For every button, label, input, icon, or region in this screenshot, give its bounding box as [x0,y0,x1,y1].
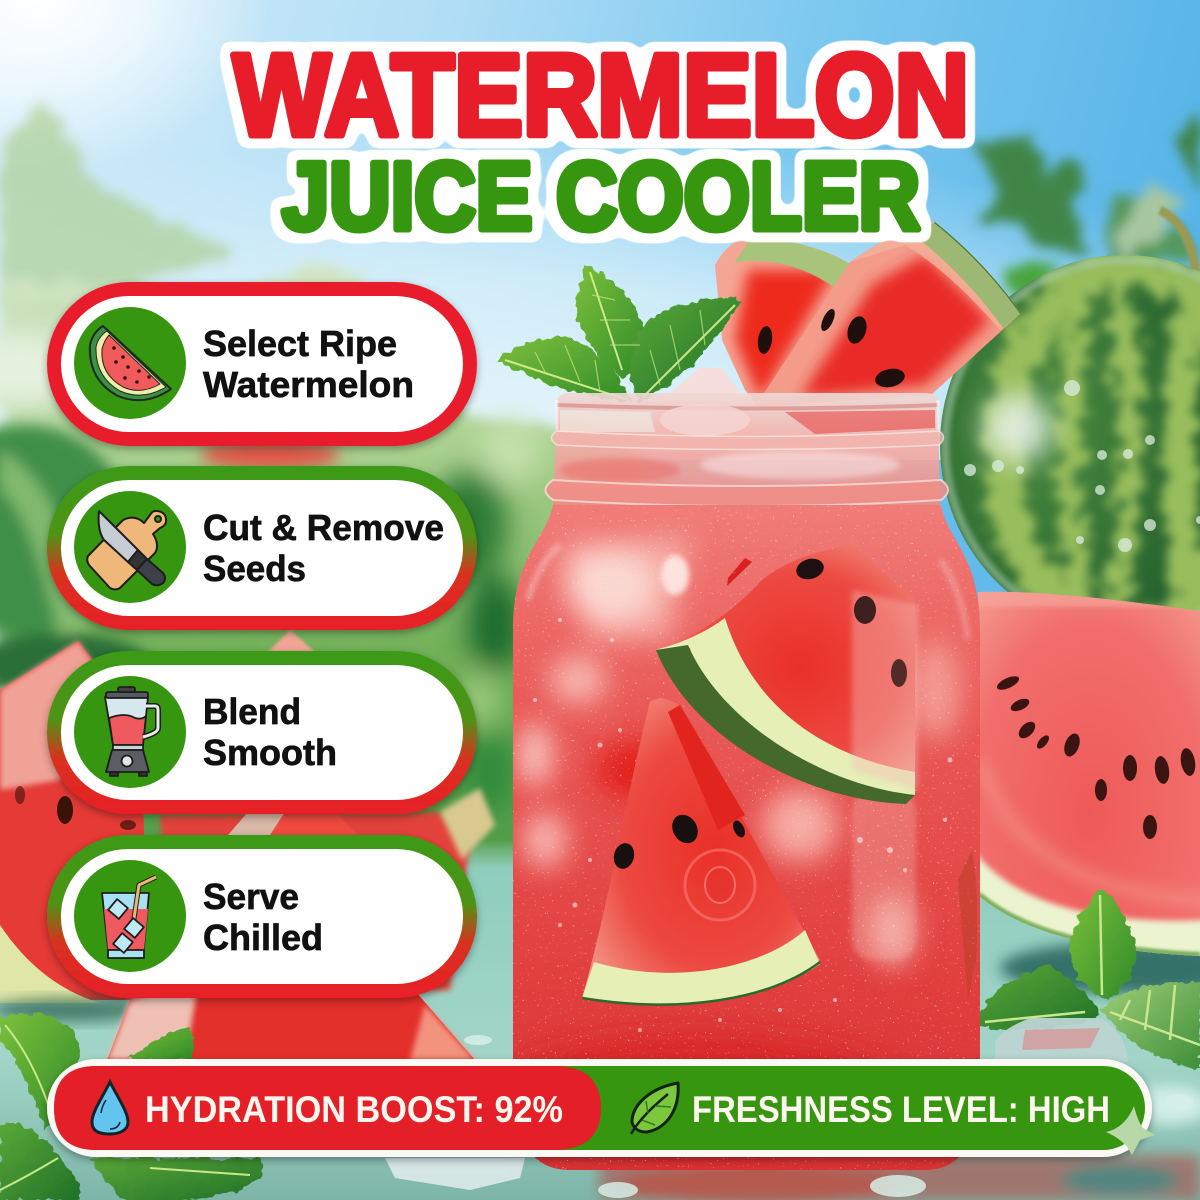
background: leaves top right [972,110,1200,295]
step card 3: blend smooth [47,651,477,814]
watermelon wedge bottom left [107,985,475,1060]
mint garnish [497,265,742,402]
jar rear slice: right wedge [756,222,1021,406]
background: blurred foliage left [0,95,640,880]
condensation specks [513,505,980,1170]
icon: watermelon slice [90,326,171,400]
upper thread [552,431,944,450]
step 2 label: Cut & Remove [203,507,444,548]
stats bar [47,1059,1155,1157]
step 1 label [203,323,414,405]
slice in jar: lower wedge [582,699,820,1005]
step 4 label: Serve [203,876,299,917]
step 1 label: Select Ripe [203,323,397,364]
step card 1: select ripe watermelon [47,282,477,446]
whole watermelon right [940,255,1200,611]
watermelon half slice right [970,580,1200,970]
icon: leaf [631,1083,678,1134]
drink jar [497,215,1030,1170]
step 3 label: Blend [203,691,301,732]
background: blurred whole melon left [0,425,340,697]
title [233,30,969,250]
freshness label: FRESHNESS LEVEL: HIGH [692,1089,1110,1130]
jar contents [500,505,980,1170]
watermelon wedge left, behind the step cards [0,630,495,1003]
icon: blender [105,687,158,776]
step 2 label: Seeds [203,548,306,589]
step card 2: cut and remove seeds [47,466,477,630]
lower thread [546,480,948,506]
step 4 label: Chilled [203,917,323,958]
icon: chilled glass with straw [102,877,156,958]
pale column highlight [852,790,916,960]
ice cube on table [995,1018,1128,1062]
step 3 label: Smooth [203,732,337,773]
slice in jar: upper wedge [655,545,918,804]
icon: water drop [92,1082,128,1134]
ice in jar top [655,368,760,440]
mint leaves bottom left [0,1014,262,1200]
step 3 label [203,691,337,773]
step card 4: serve chilled [47,835,477,998]
title line: JUICE COOLER: JUICE COOLER [282,143,920,250]
jar body [513,505,980,1170]
step 2 label [203,507,444,589]
sparkle mark [1106,1106,1155,1155]
shadow under left wedge [0,998,150,1022]
step 4 label [203,876,323,958]
water droplets on table [385,1035,1194,1198]
glass highlights and condensation [528,545,977,1032]
icon: knife and cutting board [87,511,166,590]
step 1 label: Watermelon [203,364,414,405]
jar rear slice: left wedge [715,240,850,404]
mint leaves bottom right [978,888,1200,1068]
title line: WATERMELON: WATERMELON [233,30,969,160]
hydration label: HYDRATION BOOST: 92% [145,1089,563,1130]
jar neck [546,393,948,506]
background: table surface [0,840,1200,1200]
